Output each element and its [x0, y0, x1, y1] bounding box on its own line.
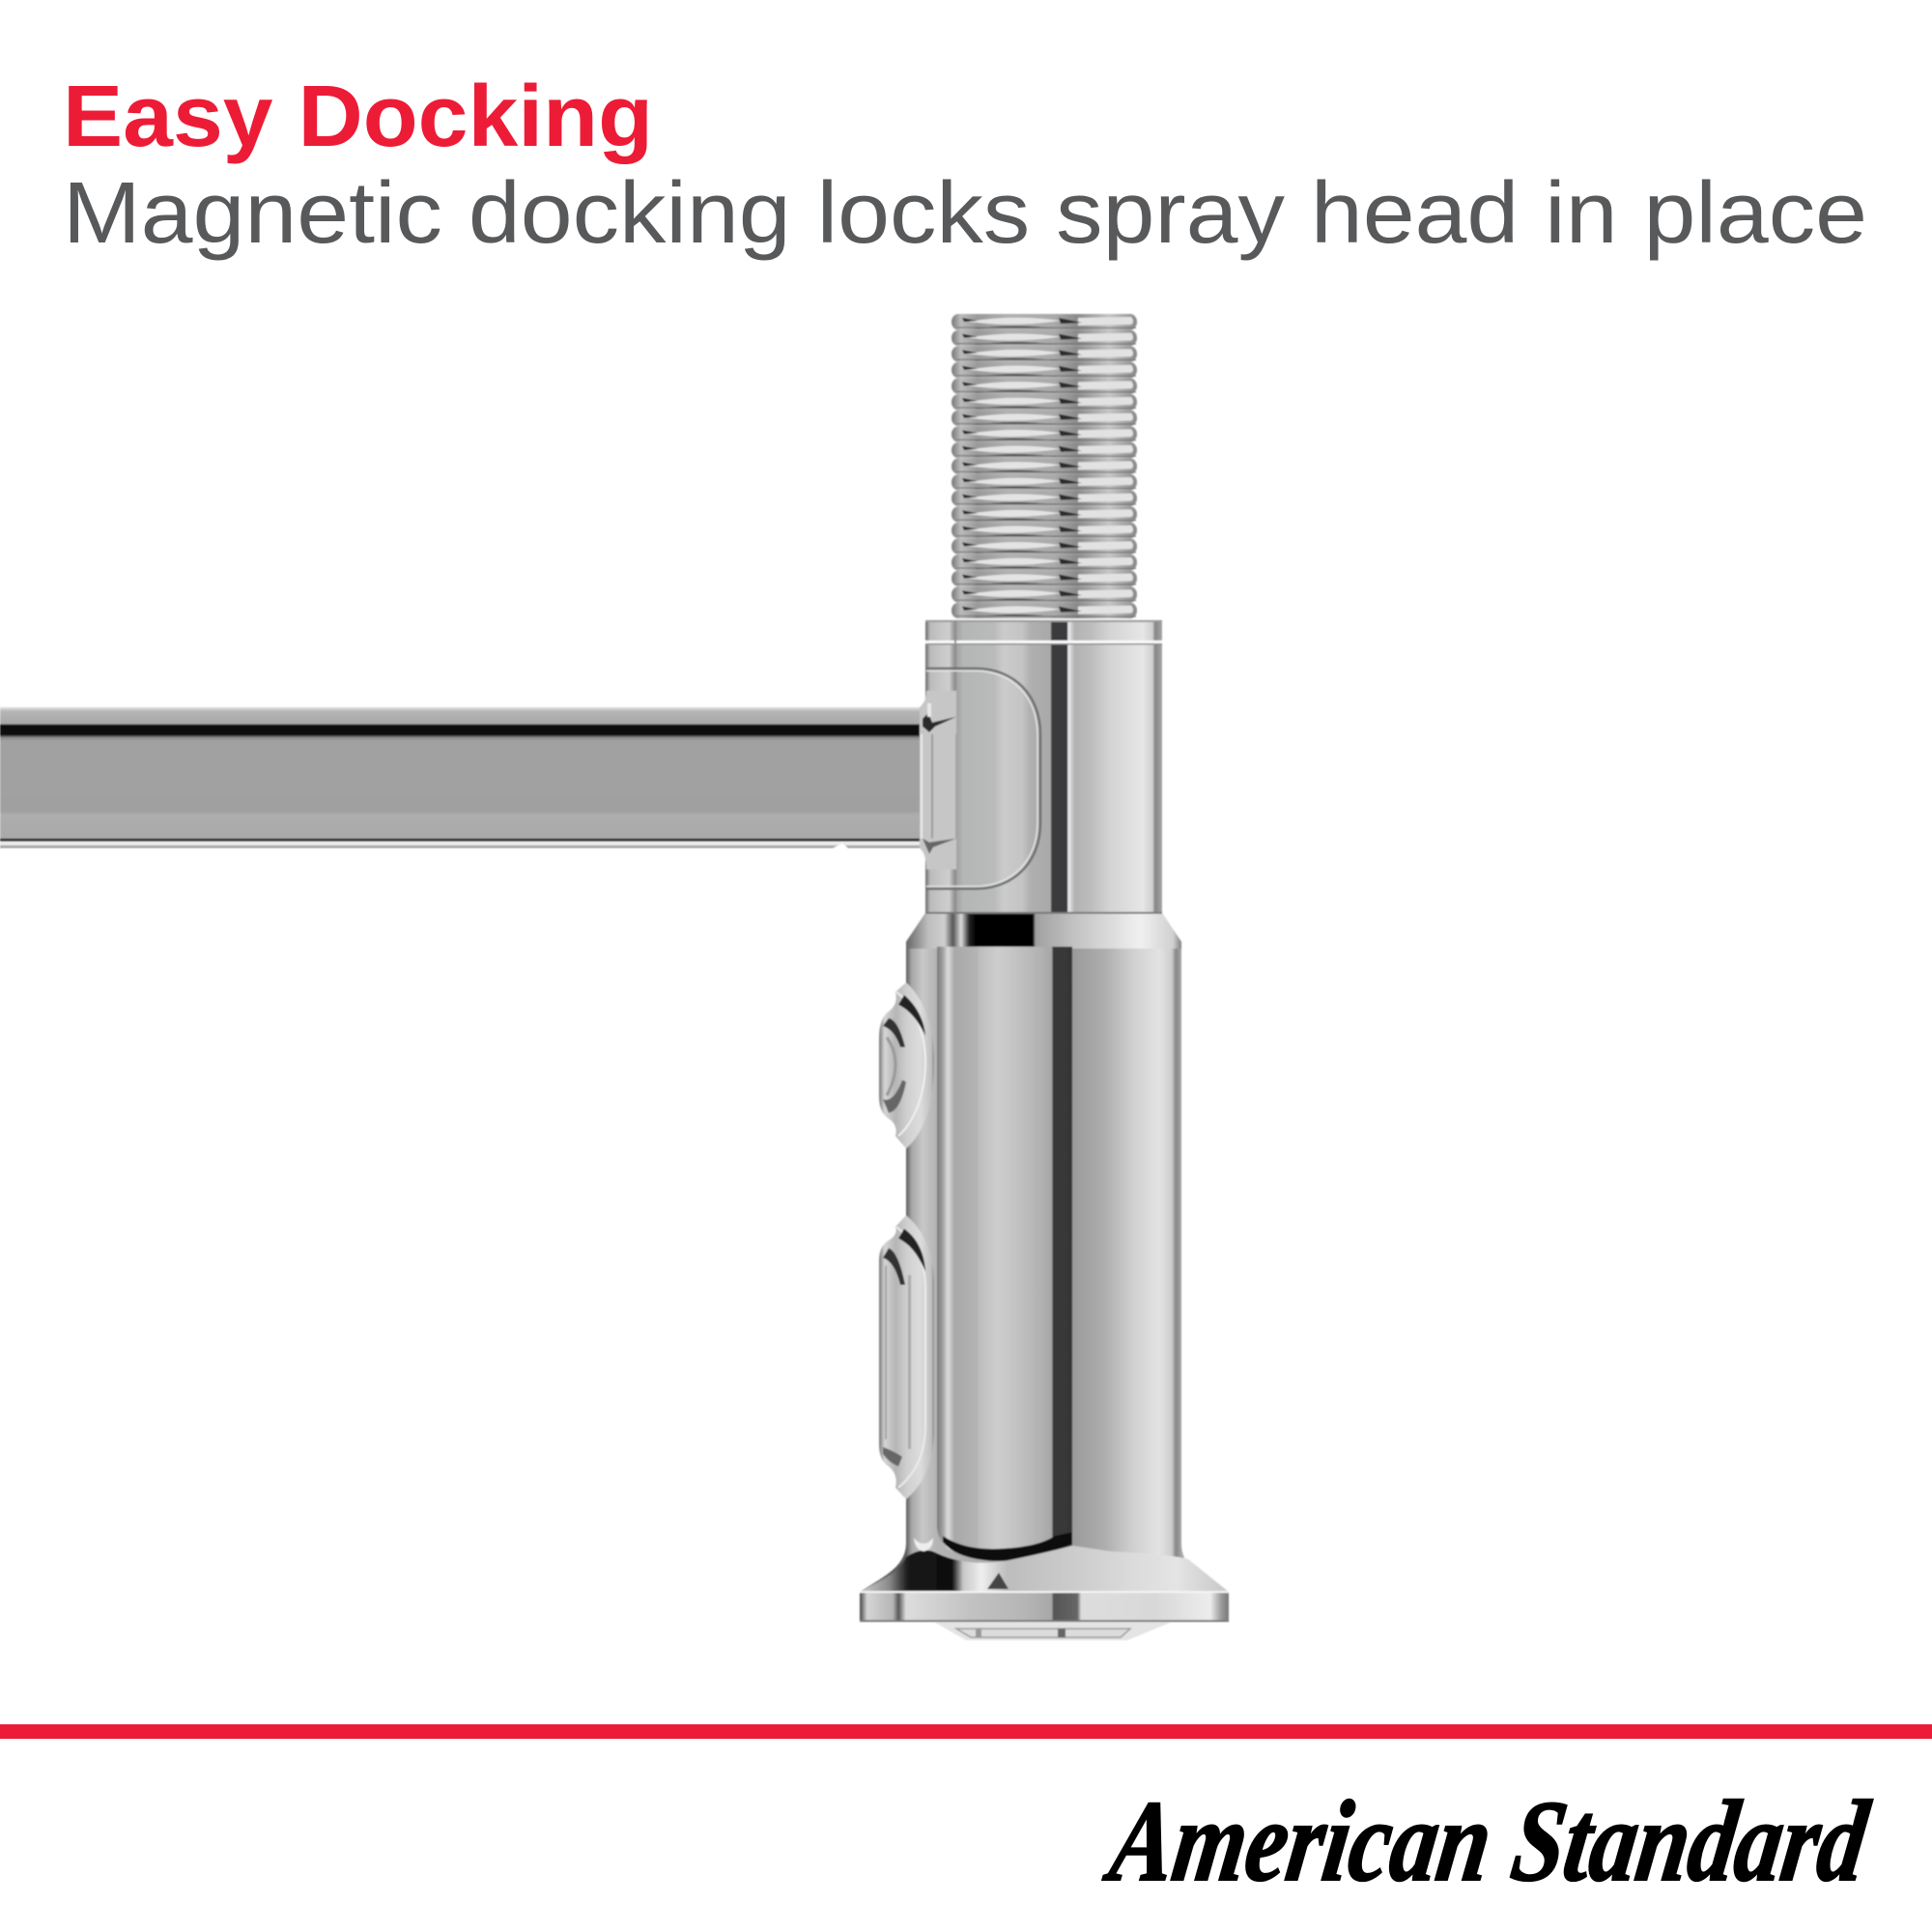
subtitle: Magnetic docking locks spray head in place: [63, 165, 1867, 262]
docking collar: [920, 620, 1162, 914]
docking D outline: [926, 668, 1040, 889]
base plate: [860, 1591, 1229, 1622]
threaded hose: [952, 314, 1137, 618]
inner recessed panel: [937, 947, 1072, 1561]
button: small upper: [879, 982, 934, 1149]
spout arm: [0, 707, 923, 848]
button: long lower: [879, 1215, 934, 1499]
illustration: pull-down faucet spray head docked to spout: [0, 314, 1229, 1640]
title: Easy Docking: Easy Docking: [63, 69, 653, 165]
flare base: [860, 1546, 1229, 1592]
junction: [920, 691, 956, 869]
spray head body: [860, 912, 1229, 1592]
spray nozzle: [934, 1622, 1172, 1640]
red divider: [0, 1724, 1932, 1739]
